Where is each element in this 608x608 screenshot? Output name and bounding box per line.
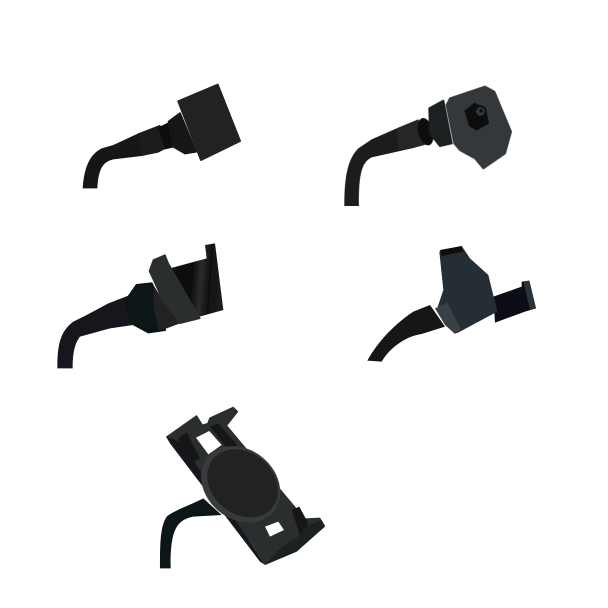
bolt (464, 103, 489, 131)
rail shadows (178, 423, 308, 535)
mount 4: blue-black clip holder (367, 246, 536, 362)
mount 1: square rubber plate on gooseneck (83, 85, 240, 188)
top cutout (196, 431, 222, 454)
mount 2: plate with bolt on gooseneck (344, 87, 511, 206)
round pad (186, 430, 296, 538)
bottom cutout (265, 522, 284, 537)
mount 3: clip holder side view (57, 243, 223, 368)
mount 5: tablet holder with round pad (160, 407, 325, 568)
